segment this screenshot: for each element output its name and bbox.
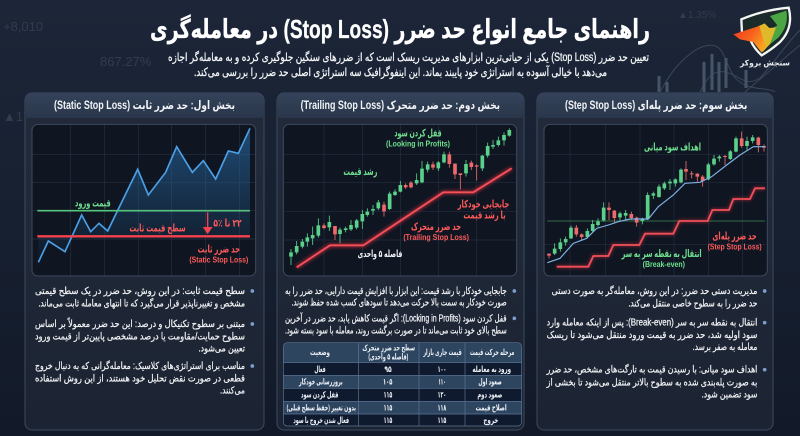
decorative market numbers: +8,010 (3, 19, 43, 34)
candlestick chart: رشد قیمت (343, 167, 377, 178)
candlestick chart: قفل کردن سود (394, 129, 442, 140)
table: ورود به معامله (472, 364, 511, 375)
panel: trailing stop loss (277, 93, 524, 430)
panel header (277, 93, 524, 118)
decorative market numbers: ▲17.35 (3, 109, 48, 124)
table: ۱۱۵ (384, 390, 393, 400)
table: فعال شدن خروج با سود (293, 415, 349, 426)
candlestick chart: حد ضرر متحرک (411, 222, 461, 233)
bullets text: صورت خودکار به سمت بالا حرکت می‌دهد تا سودهای کسب شده حفظ شوند. (292, 298, 507, 309)
title: راهنمای جامع انواع حد ضرر (Stop Loss) در معامله‌گری (150, 14, 650, 45)
table: بروزرسانی خودکار (298, 377, 343, 388)
candlestick chart: (Trailing Stop Loss) (403, 232, 469, 242)
line chart: حد ضرر ثابت (198, 245, 240, 256)
table: ۱۱۵ (384, 402, 393, 412)
panel header (25, 93, 264, 118)
icon: logo (733, 8, 790, 68)
table: خروج (483, 415, 498, 426)
bullets text: قفل کردن سود (Locking in Profits): اگر قیمت کاهش یابد، حد ضرر در آخرین (285, 311, 507, 324)
table: ۱۱۸ (438, 402, 447, 412)
arrow (204, 212, 211, 233)
candlestick chart: (Looking in Profits) (386, 139, 450, 149)
decorative background chart (659, 30, 800, 92)
table: فعال (314, 364, 326, 374)
decorative market numbers: ▲1.35% (678, 10, 716, 21)
table: ۱۱۰ (438, 377, 446, 387)
table: ۱۱۵ (384, 415, 393, 425)
line chart (32, 124, 256, 276)
bullets text: می‌کنند. (220, 386, 245, 397)
candlestick chart: با رشد قیمت (463, 210, 506, 221)
table: وضعیت (310, 347, 330, 358)
panel: step stop loss (537, 93, 773, 430)
step chart: (Break-even) (643, 259, 685, 269)
decorative market numbers: 29.17% (100, 125, 145, 140)
table: (فاصله ۵ واحدی) (368, 351, 408, 362)
heading: بخش سوم: حد ضرر پله‌ای (Step Stop Loss) (565, 99, 747, 113)
candlestick chart: جابجایی خودکار (457, 199, 509, 210)
table: ۱۲۰ (438, 390, 446, 400)
table: قفل کردن سود (301, 390, 338, 401)
bullets text: مناسب برای استراتژی‌های کلاسیک: معامله‌گرانی که به دنبال خروج (35, 360, 245, 372)
step chart: اهداف سود میانی (644, 142, 701, 153)
table: ۱۰۰ (438, 364, 446, 374)
step chart: انتقال به نقطه سر به سر (621, 249, 702, 260)
bullets text: قطعی در صورت نقض تحلیل خود هستند، از این روش استفاده (35, 373, 245, 384)
candlestick chart: فاصله ۵ واحدی (358, 249, 402, 260)
line chart: ۲۲ تا ٪۵ (213, 219, 242, 230)
intro text: تعیین حد ضرر (Stop Loss) یکی از حیاتی‌ترین ابزارهای مدیریت ریسک است که از ضررهای سنگین جلوگیری کرده و به معامله‌گر اجازه (168, 50, 649, 65)
intro text (168, 50, 649, 80)
line chart: (Static Stop Loss) (189, 254, 249, 264)
table: قیمت جاری بازار (423, 347, 462, 358)
step chart: (Step Stop Loss) (708, 242, 762, 252)
decorative market numbers (3, 10, 716, 140)
step chart (544, 124, 767, 276)
bullets text: به صورت پله‌بندی شده به سطوح بالاتر منتقل می‌شود تا بخشی از (546, 377, 757, 388)
bullets text: مشخص و تغییرناپذیر قرار می‌گیرد که تا انتهای معامله ثابت می‌ماند. (38, 297, 245, 309)
decorative market numbers: 867.27% (100, 54, 152, 69)
table (283, 342, 522, 426)
bullets text: سطح قیمت ثابت: در این روش، حد ضرر در یک سطح قیمتی (35, 286, 245, 297)
bullets text: معامله به صفر برسد. (693, 342, 757, 353)
bullets text: جابجایی خودکار با رشد قیمت: این ابزار با افزایش قیمت دارایی، حد ضرر را به (285, 286, 507, 297)
step chart: حد ضرر پله‌ای (712, 232, 757, 243)
table: ۹۵ (384, 364, 392, 374)
panel header (537, 93, 773, 118)
table: مرحله حرکت قیمت (470, 347, 514, 358)
bullets text: سطوح حمایت/مقاومت یا درصد مشخصی پایین‌تر از قیمت ورود (35, 331, 245, 342)
line chart: قیمت ورود (75, 199, 111, 210)
bullets text: مدیریت دستی حد ضرر: در این روش، معامله‌گر به صورت دستی (552, 285, 757, 297)
table: صعود دوم (477, 390, 502, 401)
bullets text (35, 286, 252, 397)
bullets text: حد ضرر را به سطوح خاصی منتقل می‌کند. (628, 298, 757, 309)
bullets text: سود تضمین شود. (702, 390, 757, 401)
table: اصلاح قیمت (476, 402, 507, 413)
line chart: سطح قیمت ثابت (129, 224, 186, 235)
table: سطح حد ضرر متحرک (362, 342, 415, 353)
bullets text: انتقال به نقطه سر به سر (Break-even): پس از اینکه معامله وارد (547, 318, 757, 329)
bullets text (546, 285, 765, 401)
bullets text: مبتنی بر سطوح تکنیکال و درصد: این حد ضرر معمولاً بر اساس (35, 318, 245, 330)
bullets text (285, 286, 514, 337)
bullets text: تعیین می‌شود. (198, 343, 245, 354)
table: بدون تغییر (حفظ سطح قبلی) (287, 402, 356, 413)
candlestick chart (283, 124, 517, 276)
heading: بخش اول: حد ضرر ثابت (Static Stop Loss) (54, 99, 235, 113)
table: ۱۰۵ (383, 377, 393, 387)
table: ۱۱۵ (438, 415, 447, 425)
table: صعود اول (478, 377, 502, 388)
panel: static stop loss (25, 93, 264, 430)
bullets text: سطح بالای خود ثابت می‌ماند تا در صورت برگشت روند، معامله با سود بسته شود. (285, 325, 507, 337)
intro text: می‌دهد با خیالی آسوده به استراتژی خود پایبند بماند. این اینفوگرافیک سه استراتژی اصلی حد ضرر را بررسی می‌کند. (194, 65, 607, 80)
bullets text: سود اولیه شد، حد ضرر به قیمت ورود منتقل می‌شود تا ریسک (547, 330, 757, 341)
heading: بخش دوم: حد ضرر متحرک (Trailing Stop Loss) (301, 99, 500, 113)
icon: logo: سنجش بروکر (739, 58, 790, 68)
